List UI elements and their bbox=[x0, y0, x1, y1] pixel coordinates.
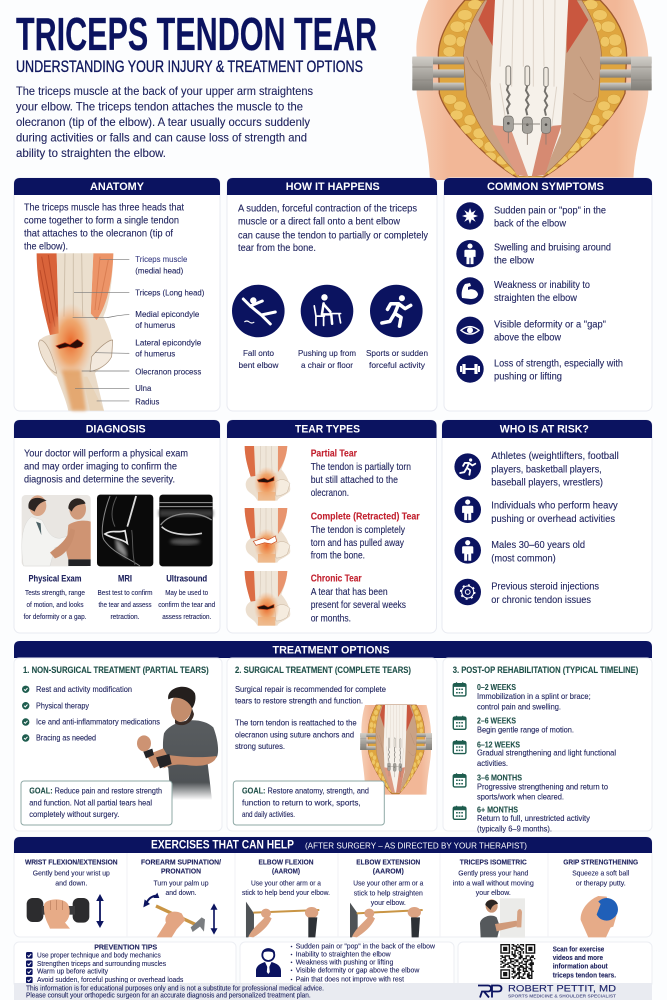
panel: who is at risk: WHO IS AT RISK? bbox=[500, 424, 589, 436]
warning signs list: Visible deformity or gap above the elbow bbox=[296, 966, 420, 974]
column: surgical treatment: tears to restore strength and function. bbox=[235, 696, 363, 705]
icon: hand squeezing ball bbox=[581, 896, 618, 937]
icon captions bbox=[238, 348, 428, 370]
exercise: wrist flexion: and down. bbox=[55, 879, 87, 888]
column: surgical treatment: olecranon using suture anchors and bbox=[235, 730, 354, 739]
exercise: elbow extension bbox=[350, 858, 423, 937]
illustration: surgical repair of the tendon bbox=[412, 0, 652, 180]
column: post-op rehabilitation timeline: 6+ MONTHS bbox=[477, 806, 519, 815]
warning signs list bbox=[291, 942, 436, 984]
exercise: grip strengthening: or therapy putty. bbox=[576, 879, 626, 888]
column: post-op rehabilitation timeline: 6–12 WEEKS bbox=[477, 740, 521, 749]
column: non-surgical treatment: 1. NON-SURGICAL TREATMENT (PARTIAL TEARS) bbox=[23, 665, 209, 675]
column: non-surgical treatment: Bracing as needed bbox=[36, 734, 96, 743]
panel: tear types bbox=[227, 420, 436, 633]
panel: tear types: TEAR TYPES bbox=[295, 424, 360, 436]
tear type descriptions: torn and has pulled away bbox=[311, 538, 405, 549]
column: post-op rehabilitation timeline: 2–6 WEEKS bbox=[477, 717, 517, 726]
illustration: complete tear bbox=[245, 508, 290, 563]
disclaimer: Please consult your orthopedic surgeon for an accurate diagnosis and personalized treatment plan. bbox=[26, 992, 311, 999]
column: post-op rehabilitation timeline: Progressive strengthening and return to bbox=[477, 782, 609, 791]
icon: running bbox=[370, 285, 423, 337]
icon: person swelling bbox=[456, 240, 484, 267]
image captions: of motion, and looks bbox=[26, 602, 84, 609]
panel: prevention tips: PREVENTION TIPS bbox=[94, 942, 157, 951]
heading: exercises: EXERCISES THAT CAN HELP bbox=[151, 840, 294, 852]
symptoms text: Sudden pain or "pop" in the bbox=[494, 206, 606, 217]
anatomy labels: Ulna bbox=[135, 383, 151, 393]
column: post-op rehabilitation timeline: (typically 6–9 months). bbox=[477, 824, 552, 833]
column: post-op rehabilitation timeline: Gradual strengthening and light functional bbox=[477, 749, 616, 758]
column: post-op rehabilitation timeline: 3–6 MONTHS bbox=[477, 774, 523, 783]
tear type descriptions: or months. bbox=[311, 613, 351, 624]
image captions: the tear and assess bbox=[98, 602, 152, 609]
illustration: elbow anatomy bbox=[37, 253, 129, 411]
icon: male bbox=[454, 537, 481, 564]
column: non-surgical treatment: Ice and anti-inflammatory medications bbox=[36, 718, 160, 727]
warning signs list: Weakness with pushing or lifting bbox=[296, 958, 393, 966]
risk text: (most common) bbox=[491, 554, 556, 565]
icon captions: forceful activity bbox=[369, 360, 426, 370]
icon captions: bent elbow bbox=[238, 360, 279, 370]
exercise: elbow extension: (AAROM) bbox=[373, 867, 404, 876]
image captions: retraction. bbox=[110, 614, 140, 621]
symptoms text: Visible deformity or a "gap" bbox=[494, 320, 606, 331]
icon: hammer and rotation arrow bbox=[143, 893, 205, 937]
goal box bbox=[233, 781, 384, 825]
diagnosis text bbox=[24, 449, 188, 486]
icon: eye bbox=[456, 317, 484, 344]
exercise: elbow flexion: stick to help bend your elbow. bbox=[242, 888, 330, 897]
icon: stick assisted extension bbox=[350, 903, 423, 937]
exercise: grip strengthening: GRIP STRENGTHENING bbox=[563, 858, 639, 867]
exercise: triceps isometric: your elbow. bbox=[476, 888, 511, 897]
column: surgical treatment: Surgical repair is recommended for complete bbox=[235, 685, 387, 694]
panel: prevention tips: Strengthen triceps and surrounding muscles bbox=[37, 959, 166, 968]
risk text: Previous steroid injections bbox=[491, 582, 599, 593]
icon captions: Pushing up from bbox=[298, 348, 356, 358]
tear type descriptions: Chronic Tear bbox=[311, 573, 362, 584]
symptoms text: pushing or lifting bbox=[494, 372, 562, 383]
tear type descriptions: Complete (Retracted) Tear bbox=[311, 512, 420, 523]
goal box bbox=[21, 781, 172, 825]
QR caption bbox=[553, 944, 616, 979]
icon: fall bbox=[232, 285, 285, 337]
tear type descriptions: olecranon. bbox=[311, 488, 349, 499]
tear type descriptions: but still attached to the bbox=[311, 475, 398, 486]
panel: prevention tips: Use proper technique and body mechanics bbox=[37, 951, 161, 960]
tear type descriptions: A tear that has been bbox=[311, 587, 388, 598]
goal box: completely without surgery. bbox=[29, 810, 119, 819]
exercise: grip strengthening: Squeeze a soft ball bbox=[572, 869, 630, 878]
image captions: assess retraction. bbox=[162, 614, 211, 621]
column: post-op rehabilitation timeline: sports/work when cleared. bbox=[477, 793, 564, 802]
risk text: pushing or overhead activities bbox=[491, 514, 615, 525]
exercise: forearm supination: PRONATION bbox=[161, 867, 201, 876]
anatomy labels: Lateral epicondyle bbox=[135, 338, 201, 348]
anatomy text: come together to form a single tendon bbox=[24, 216, 179, 226]
anatomy labels: Olecranon process bbox=[135, 366, 202, 376]
goal box: function to return to work, sports, bbox=[242, 798, 361, 807]
panel: how it happens: HOW IT HAPPENS bbox=[286, 181, 380, 193]
how it happens text: muscle or a direct fall onto a bent elbow bbox=[238, 217, 400, 228]
illustration: man with elbow brace bbox=[137, 687, 218, 800]
goal box: GOAL: Restore anatomy, strength, and bbox=[242, 787, 369, 796]
symptoms text: Swelling and bruising around bbox=[494, 243, 611, 254]
exercise: elbow extension: stick to help straighten bbox=[354, 888, 423, 898]
column: non-surgical treatment bbox=[14, 658, 222, 831]
exercise: forearm supination: and down. bbox=[166, 888, 196, 897]
panel: who is at risk bbox=[442, 420, 652, 633]
image captions bbox=[24, 574, 215, 621]
goal box: and function. Not all partial tears heal bbox=[29, 798, 152, 807]
anatomy labels: of humerus bbox=[135, 349, 176, 359]
symptoms text: Loss of strength, especially with bbox=[494, 359, 623, 370]
symptoms text: above the elbow bbox=[494, 333, 561, 344]
panel: prevention tips: Warm up before activity bbox=[37, 967, 108, 976]
anatomy labels bbox=[135, 254, 204, 406]
image captions: Best test to confirm bbox=[98, 590, 153, 597]
goal box: and daily activities. bbox=[242, 810, 295, 819]
icon: athlete bbox=[454, 453, 481, 480]
anatomy labels: Medial epicondyle bbox=[135, 309, 199, 319]
exercise: forearm supination: FOREARM SUPINATION/ bbox=[141, 858, 221, 867]
anatomy labels: of humerus bbox=[135, 320, 176, 330]
intro text: The triceps muscle at the back of your upper arm straightens bbox=[16, 85, 313, 98]
panel: common symptoms: COMMON SYMPTOMS bbox=[487, 181, 604, 193]
risk text: baseball players, wrestlers) bbox=[491, 478, 603, 489]
anatomy labels: Radius bbox=[135, 396, 160, 406]
heading: exercises: (AFTER SURGERY – AS DIRECTED BY YOUR THERAPIST) bbox=[305, 841, 527, 851]
risk text: Individuals who perform heavy bbox=[491, 501, 618, 512]
column: post-op rehabilitation timeline: Return to full, unrestricted activity bbox=[477, 814, 590, 823]
QR caption: videos and more bbox=[553, 953, 603, 962]
illustration: chronic tear bbox=[245, 571, 290, 626]
image captions: for deformity or a gap. bbox=[24, 614, 87, 621]
column: post-op rehabilitation timeline: activities. bbox=[477, 759, 508, 768]
panel: prevention tips bbox=[14, 942, 236, 988]
anatomy text: The triceps muscle has three heads that bbox=[24, 203, 184, 214]
icon: dumbbell in hand bbox=[27, 898, 89, 929]
disclaimer bbox=[26, 985, 324, 999]
panel: anatomy bbox=[14, 178, 220, 411]
tear type descriptions: present for several weeks bbox=[311, 600, 406, 611]
exercise: elbow flexion: (AAROM) bbox=[272, 867, 301, 876]
QR caption: information about bbox=[553, 962, 608, 971]
exercise: grip strengthening bbox=[563, 858, 639, 937]
heading: treatment options: TREATMENT OPTIONS bbox=[272, 644, 390, 656]
exercise: triceps isometric: into a wall without moving bbox=[453, 878, 534, 887]
column: post-op rehabilitation timeline: 3. POST-OP REHABILITATION (TYPICAL TIMELINE) bbox=[453, 665, 638, 675]
tear type descriptions: The tendon is completely bbox=[311, 525, 406, 536]
panel: QR code bbox=[458, 942, 652, 988]
anatomy labels: (medial head) bbox=[135, 265, 183, 275]
icon: man pressing wall bbox=[480, 898, 525, 938]
column: post-op rehabilitation timeline: Begin gentle range of motion. bbox=[477, 725, 574, 734]
risk text: or chronic tendon issues bbox=[491, 595, 591, 606]
intro text: ability to straighten the elbow. bbox=[16, 147, 166, 160]
exercise: elbow flexion bbox=[242, 858, 330, 937]
column: post-op rehabilitation timeline: 0–2 WEEKS bbox=[477, 683, 517, 692]
warning signs list: Sudden pain or "pop" in the back of the elbow bbox=[296, 942, 436, 951]
column: surgical treatment: 2. SURGICAL TREATMENT (COMPLETE TEARS) bbox=[235, 665, 411, 675]
logo: SPORTS MEDICINE & SHOULDER SPECIALIST bbox=[508, 993, 616, 998]
panel: prevention tips: Avoid sudden, forceful pushing or overhead loads bbox=[37, 975, 184, 984]
column: surgical treatment: strong sutures. bbox=[235, 742, 285, 751]
heading: exercises bbox=[151, 840, 527, 852]
panel: diagnosis: DIAGNOSIS bbox=[86, 424, 146, 436]
QR caption: triceps tendon tears. bbox=[553, 970, 616, 979]
warning signs list: Pain that does not improve with rest bbox=[296, 975, 404, 984]
risk text: players, basketball players, bbox=[491, 464, 602, 475]
logo: ROBERT PETTIT, MD bbox=[508, 983, 616, 994]
anatomy text: the elbow). bbox=[24, 242, 68, 252]
column: non-surgical treatment: Rest and activity modification bbox=[36, 685, 132, 694]
symptoms text: back of the elbow bbox=[494, 219, 566, 230]
icon: pain burst bbox=[456, 202, 484, 230]
panel: anatomy: ANATOMY bbox=[90, 181, 145, 193]
exercise: wrist flexion: WRIST FLEXION/EXTENSION bbox=[25, 858, 118, 867]
exercise: elbow extension: ELBOW EXTENSION bbox=[356, 858, 420, 867]
intro text: your elbow. The triceps tendon attaches the muscle to the bbox=[16, 101, 303, 114]
diagnosis text: diagnosis and determine the severity. bbox=[24, 475, 175, 486]
image captions: Physical Exam bbox=[28, 574, 82, 584]
exercise: forearm supination: Turn your palm up bbox=[154, 878, 208, 887]
tear type descriptions: from the bone. bbox=[311, 551, 365, 562]
column: post-op rehabilitation timeline bbox=[443, 658, 652, 833]
panel: how it happens bbox=[227, 178, 437, 411]
icon: chair bbox=[301, 285, 353, 337]
exercise: triceps isometric: Gently press your hand bbox=[458, 869, 528, 878]
intro text: during activities or falls and can cause loss of strength and bbox=[16, 132, 307, 145]
exercise: wrist flexion: Gently bend your wrist up bbox=[33, 869, 110, 878]
how it happens text: can cause the tendon to partially or completely bbox=[238, 230, 429, 241]
icon captions: Sports or sudden bbox=[366, 348, 428, 358]
exercise: triceps isometric bbox=[453, 858, 534, 938]
panel: diagnosis bbox=[14, 420, 220, 633]
image captions: May be used to bbox=[165, 590, 208, 597]
panel: common symptoms bbox=[444, 178, 652, 411]
subtitle: UNDERSTANDING YOUR INJURY & TREATMENT OPTIONS bbox=[16, 58, 363, 76]
anatomy text bbox=[24, 203, 184, 252]
tear type descriptions: The tendon is partially torn bbox=[311, 462, 411, 473]
tear type descriptions bbox=[311, 448, 420, 624]
icon: muscle bbox=[456, 277, 484, 305]
illustration: partial tear bbox=[245, 446, 290, 501]
risk text: Athletes (weightlifters, football bbox=[491, 451, 619, 462]
disclaimer: This information is for educational purposes only and is not a substitute for professional medical advice. bbox=[26, 985, 324, 992]
QR caption: Scan for exercise bbox=[553, 944, 604, 953]
symptoms text: the elbow bbox=[494, 256, 534, 267]
icon: doctor bbox=[256, 948, 281, 977]
footer bbox=[14, 983, 652, 1000]
exercise: elbow extension: Use your other arm or a bbox=[353, 878, 423, 887]
how it happens text: tear from the bone. bbox=[238, 243, 316, 254]
goal box: GOAL: Reduce pain and restore strength bbox=[29, 787, 162, 796]
icon captions: Fall onto bbox=[243, 348, 274, 358]
image captions: Tests strength, range bbox=[25, 590, 85, 597]
image: ultrasound bbox=[159, 495, 213, 566]
panel: exercises bbox=[14, 837, 652, 938]
column: surgical treatment bbox=[227, 658, 437, 831]
risk text bbox=[491, 451, 619, 606]
exercise: elbow extension: your elbow. bbox=[371, 898, 406, 907]
image: physical exam bbox=[22, 495, 91, 566]
symptoms text bbox=[494, 206, 623, 383]
column: post-op rehabilitation timeline: Immobilization in a splint or brace; bbox=[477, 692, 591, 701]
icon: stick assisted flexion bbox=[246, 902, 319, 937]
column: post-op rehabilitation timeline: control pain and swelling. bbox=[477, 702, 561, 711]
symptoms text: straighten the elbow bbox=[494, 293, 577, 304]
illustration: surgical repair detail bbox=[360, 705, 432, 795]
image: MRI bbox=[97, 495, 153, 566]
exercise: triceps isometric: TRICEPS ISOMETRIC bbox=[460, 858, 527, 867]
panel: treatment options bbox=[14, 641, 652, 833]
exercise: elbow flexion: ELBOW FLEXION bbox=[258, 858, 314, 867]
column: non-surgical treatment: Physical therapy bbox=[36, 701, 89, 710]
exercise: forearm supination bbox=[141, 858, 221, 937]
exercise: wrist flexion bbox=[25, 858, 118, 929]
image captions: MRI bbox=[118, 574, 132, 584]
tear type descriptions: Partial Tear bbox=[311, 448, 357, 459]
icon: person pushing bbox=[454, 496, 481, 523]
diagnosis text: Your doctor will perform a physical exam bbox=[24, 449, 188, 460]
QR code bbox=[500, 944, 535, 979]
panel: when to see a doctor bbox=[240, 942, 454, 988]
image captions: Ultrasound bbox=[166, 574, 207, 584]
column: surgical treatment: The torn tendon is reattached to the bbox=[235, 719, 357, 728]
diagnosis text: and may order imaging to confirm the bbox=[24, 462, 177, 473]
icon: gear bbox=[454, 579, 481, 605]
how it happens text: A sudden, forceful contraction of the triceps bbox=[238, 204, 417, 215]
logo bbox=[478, 983, 616, 998]
how it happens text bbox=[238, 204, 429, 254]
image captions: confirm the tear and bbox=[158, 602, 215, 609]
anatomy text: that attaches to the olecranon (tip of bbox=[24, 229, 173, 240]
icon: dumbbell bbox=[456, 355, 484, 383]
title: TRICEPS TENDON TEAR bbox=[16, 8, 377, 60]
risk text: Males 30–60 years old bbox=[491, 540, 585, 551]
symptoms text: Weakness or inability to bbox=[494, 280, 590, 291]
anatomy labels: Triceps muscle bbox=[135, 254, 187, 264]
intro text: olecranon (tip of the elbow). A tear usually occurs suddenly bbox=[16, 116, 310, 129]
anatomy labels: Triceps (Long head) bbox=[135, 288, 204, 298]
icon captions: a chair or floor bbox=[301, 360, 353, 370]
warning signs list: Inability to straighten the elbow bbox=[296, 950, 391, 959]
intro text bbox=[16, 85, 313, 160]
exercise: elbow flexion: Use your other arm or a bbox=[251, 878, 321, 887]
